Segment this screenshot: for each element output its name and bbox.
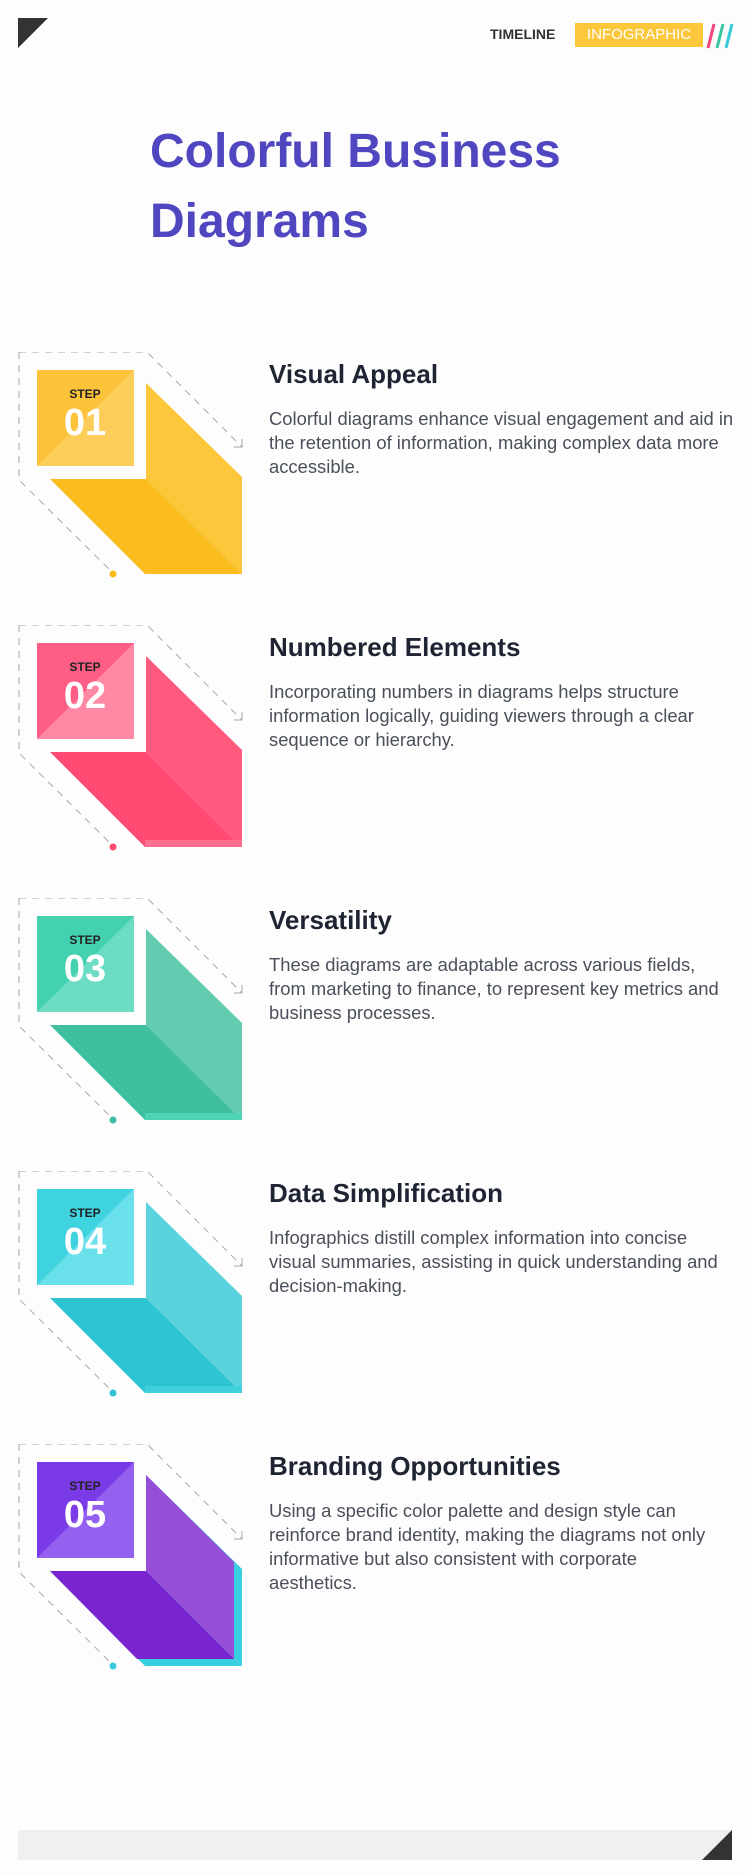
text: numbered elements: Incorporating numbers in diagrams helps structure bbox=[269, 681, 679, 702]
text: numbered elements: information logically, guiding viewers through a clear bbox=[269, 705, 694, 726]
label: timeline: TIMELINE bbox=[490, 26, 555, 42]
text: data simplification: visual summaries, assisting in quick understanding and bbox=[269, 1251, 718, 1272]
stripes bbox=[706, 24, 734, 48]
text: data simplification: Infographics distill complex information into concise bbox=[269, 1227, 687, 1248]
text: versatility: business processes. bbox=[269, 1002, 436, 1023]
corner triangle top-left bbox=[18, 18, 48, 48]
corner triangle bottom-right bbox=[702, 1830, 732, 1860]
graphic: step 5 prism: STEP bbox=[69, 1479, 101, 1493]
graphic: step 1 prism: STEP bbox=[69, 387, 101, 401]
text: versatility: from marketing to finance, to represent key metrics and bbox=[269, 978, 719, 999]
text: branding opportunities bbox=[269, 1451, 706, 1593]
badge: infographic: INFOGRAPHIC bbox=[587, 26, 691, 43]
text: visual appeal: the retention of information, making complex data more bbox=[269, 432, 719, 453]
graphic: step 4 prism: STEP bbox=[69, 1206, 101, 1220]
badge: infographic bbox=[575, 23, 703, 47]
graphic: step 4 prism: 04 bbox=[64, 1221, 106, 1263]
graphic: step 5 prism bbox=[18, 1444, 242, 1670]
title: Colorful Business bbox=[150, 125, 561, 178]
text: visual appeal: accessible. bbox=[269, 456, 360, 477]
text: branding opportunities: reinforce brand identity, making the diagrams not only bbox=[269, 1524, 705, 1545]
graphic: step 3 prism bbox=[18, 898, 242, 1124]
title bbox=[150, 125, 561, 248]
step 1 bbox=[18, 352, 733, 578]
graphic: step 3 prism: 03 bbox=[64, 948, 106, 990]
text: data simplification bbox=[269, 1178, 718, 1296]
text: visual appeal bbox=[269, 359, 733, 477]
text: branding opportunities: Branding Opportunities bbox=[269, 1451, 561, 1481]
graphic: step 2 prism: STEP bbox=[69, 660, 101, 674]
text: versatility bbox=[269, 905, 719, 1023]
step 3 bbox=[18, 898, 719, 1124]
text: versatility: Versatility bbox=[269, 905, 392, 935]
text: numbered elements: sequence or hierarchy. bbox=[269, 729, 455, 750]
text: data simplification: decision-making. bbox=[269, 1275, 407, 1296]
graphic: step 2 prism bbox=[18, 625, 242, 850]
text: branding opportunities: Using a specific color palette and design style can bbox=[269, 1500, 676, 1521]
text: visual appeal: Colorful diagrams enhance visual engagement and aid in bbox=[269, 408, 733, 429]
text: versatility: These diagrams are adaptable across various fields, bbox=[269, 954, 695, 975]
graphic: step 4 prism bbox=[18, 1171, 242, 1396]
text: data simplification: Data Simplification bbox=[269, 1178, 503, 1208]
text: branding opportunities: aesthetics. bbox=[269, 1572, 357, 1593]
graphic: step 5 prism: 05 bbox=[64, 1494, 106, 1536]
step 2 bbox=[18, 625, 694, 850]
graphic: step 3 prism: STEP bbox=[69, 933, 101, 947]
footer bar bbox=[18, 1830, 732, 1860]
graphic: step 1 prism bbox=[18, 352, 242, 578]
text: numbered elements bbox=[269, 632, 694, 750]
text: numbered elements: Numbered Elements bbox=[269, 632, 520, 662]
graphic: step 1 prism: 01 bbox=[64, 402, 106, 444]
title: Diagrams bbox=[150, 195, 369, 248]
text: visual appeal: Visual Appeal bbox=[269, 359, 438, 389]
step 4 bbox=[18, 1171, 718, 1396]
step 5 bbox=[18, 1444, 706, 1670]
header tags bbox=[490, 23, 734, 48]
text: branding opportunities: informative but also consistent with corporate bbox=[269, 1548, 637, 1569]
graphic: step 2 prism: 02 bbox=[64, 675, 106, 717]
